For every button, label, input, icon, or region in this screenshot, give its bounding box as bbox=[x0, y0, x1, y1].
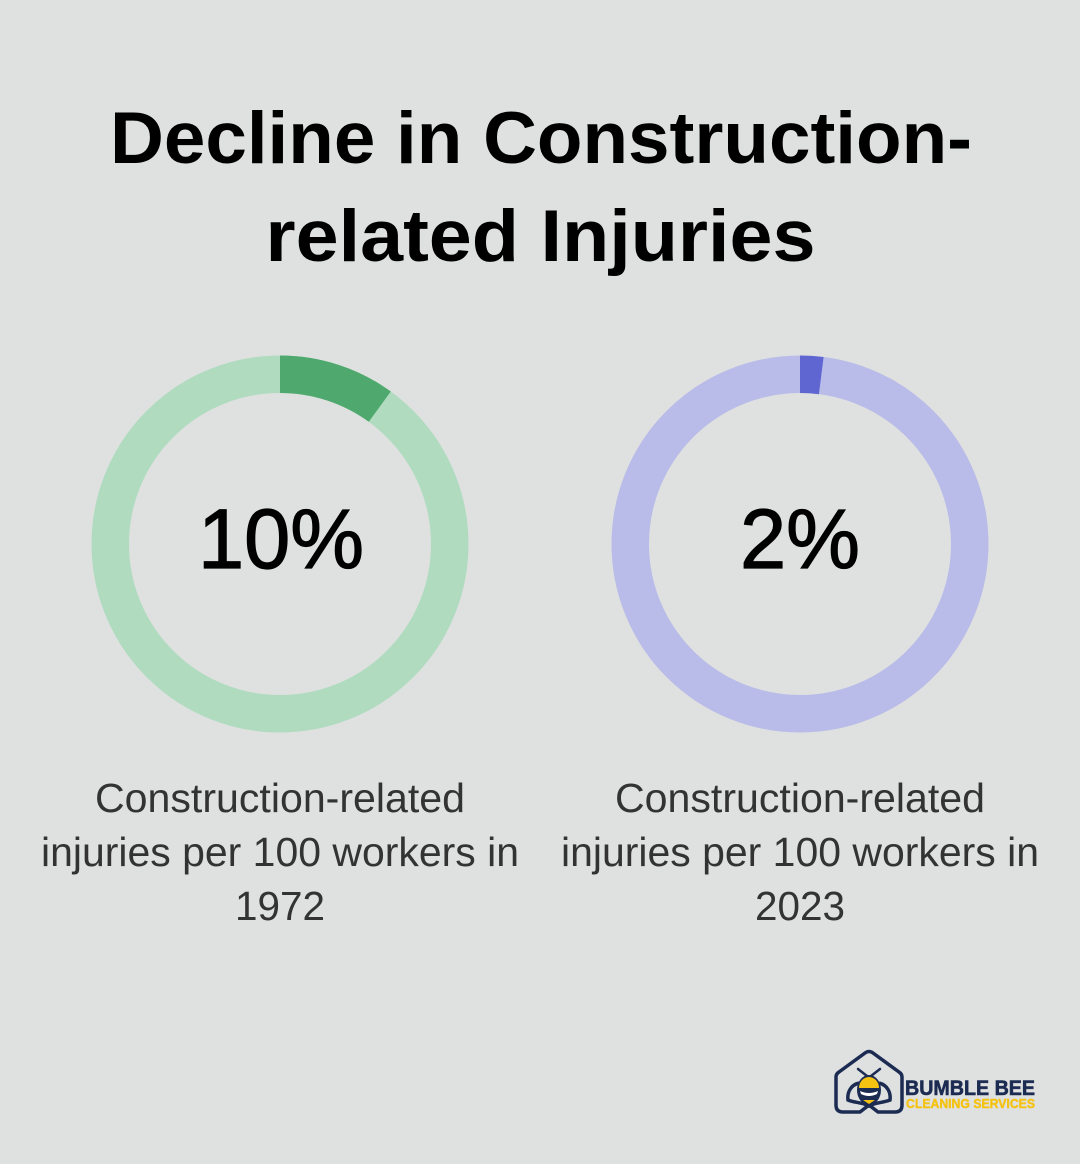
caption: 1972: Construction-related bbox=[95, 775, 465, 821]
donut chart: 2% bbox=[630, 356, 970, 714]
caption: 2023: injuries per 100 workers in bbox=[561, 829, 1039, 875]
title: Decline in Construction- bbox=[110, 98, 972, 179]
value: 10%: 10% bbox=[198, 492, 364, 586]
caption: 1972: injuries per 100 workers in bbox=[41, 829, 519, 875]
panel: 2023 statistic bbox=[561, 356, 1039, 929]
caption: 2023 bbox=[561, 775, 1039, 929]
caption: 1972: 1972 bbox=[235, 883, 325, 929]
brand tagline: CLEANING SERVICES bbox=[906, 1097, 1035, 1111]
title: related Injuries bbox=[266, 196, 816, 277]
panel: 1972 statistic bbox=[41, 355, 519, 929]
title bbox=[110, 98, 972, 277]
logo: Bumble Bee Cleaning Services bbox=[836, 1052, 1035, 1112]
caption: 2023: 2023 bbox=[755, 883, 845, 929]
icon: house with bee bbox=[836, 1052, 902, 1112]
caption: 1972 bbox=[41, 775, 519, 929]
caption: 2023: Construction-related bbox=[615, 775, 985, 821]
donut chart: 10% bbox=[110, 355, 450, 714]
brand name: BUMBLE BEE bbox=[905, 1077, 1035, 1100]
value: 2%: 2% bbox=[740, 492, 860, 586]
